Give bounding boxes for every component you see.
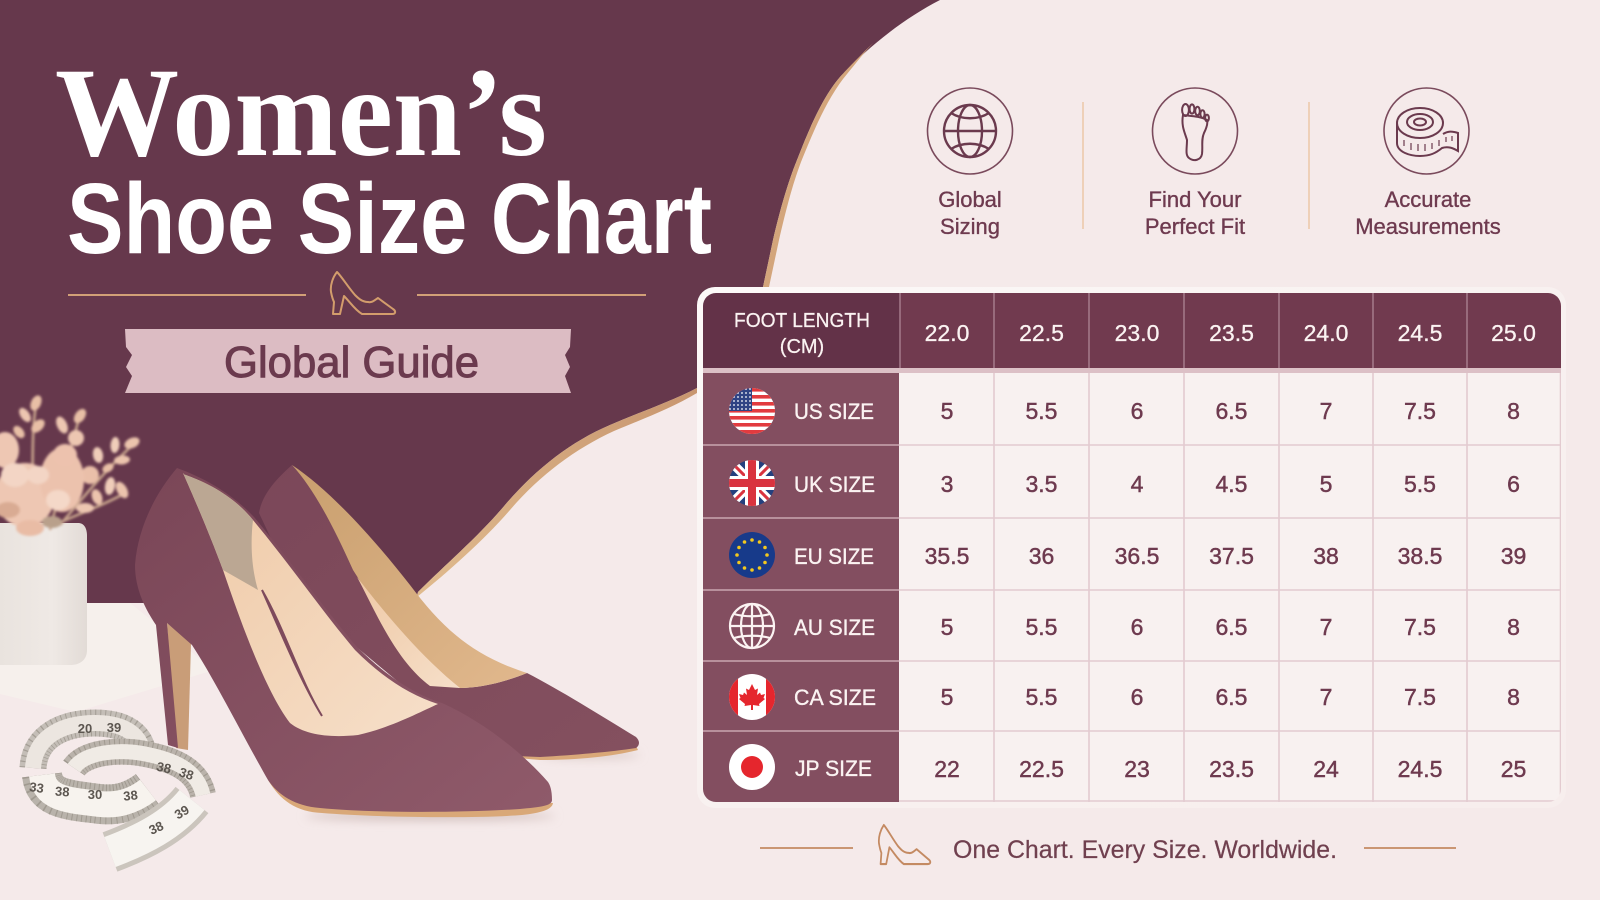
row: US size: 5 [941,398,953,424]
row: JP size: 25 [1501,756,1526,782]
ornament divider with shoe icon [68,272,646,314]
icon: EU flag [729,532,775,578]
measuring tape: 20 [78,721,92,736]
row: AU size [730,604,1520,648]
row: CA size: 5 [941,684,953,710]
row: JP size: 23 [1124,756,1150,782]
row: UK size: UK SIZE [794,472,875,497]
top feature: accurate measurements: Accurate [1385,187,1471,212]
table header row: 23.5 [1209,320,1254,346]
row: US size: 6 [1131,398,1143,424]
table header row: FOOT LENGTH [734,310,870,332]
row: EU size [729,532,1526,578]
sole edge [268,780,553,817]
row: CA size: 7.5 [1404,684,1436,710]
measuring tape: 33 [28,779,45,796]
row: US size: US SIZE [794,399,874,424]
table header row: 24.0 [1304,320,1348,346]
icon: UK flag [729,460,775,506]
row: UK size: 3.5 [1026,471,1057,497]
row: AU size: 6.5 [1216,614,1247,640]
plum curved panel [0,0,940,603]
measuring tape: 38 [177,764,196,783]
row: EU size: 39 [1501,543,1526,569]
front shoe [135,468,553,817]
row: US size: 8 [1507,398,1520,424]
row: JP size: 24.5 [1398,756,1442,782]
icon: globe [730,604,774,648]
row: JP size: 22 [934,756,960,782]
heel lining [167,623,191,750]
row: UK size: 6 [1507,471,1520,497]
table header row: 22.0 [925,320,969,346]
row: CA size: 6 [1131,684,1143,710]
row: AU size: 7.5 [1404,614,1436,640]
row: AU size: AU SIZE [794,615,875,640]
row: EU size: 37.5 [1209,543,1254,569]
top feature: global sizing [928,88,1012,239]
row: EU size: 36.5 [1115,543,1159,569]
row: EU size: EU SIZE [794,544,874,569]
icon: foot [1182,104,1209,160]
row: CA size: CA SIZE [794,685,876,710]
row: UK size: 5 [1320,471,1332,497]
row: CA size: 6.5 [1216,684,1247,710]
row: JP size: 23.5 [1209,756,1254,782]
divider [1308,102,1310,229]
row: CA size: 5.5 [1026,684,1057,710]
row: EU size: 38 [1313,543,1339,569]
row: UK size: 5.5 [1404,471,1436,497]
row: CA size [729,674,1520,720]
row: JP size: 24 [1313,756,1339,782]
ribbon: Global Guide [125,329,571,393]
row: US size: 7.5 [1404,398,1436,424]
icon: tape measure [1397,108,1458,156]
measuring tape: 38 [146,818,166,838]
row: AU size: 5 [941,614,953,640]
measuring tape: 38 [155,759,173,776]
ceramic vase [0,523,87,665]
size table [703,293,1561,802]
row: EU size: 38.5 [1398,543,1442,569]
top feature: perfect fit [1145,88,1245,239]
row: US size [729,388,1520,434]
icon: globe [944,105,996,157]
back shoe [259,465,639,760]
row: US size: 5.5 [1026,398,1057,424]
footer tagline: One Chart. Every Size. Worldwide. [953,836,1337,864]
icon: Canada flag [729,674,775,720]
size table card [697,287,1566,808]
measuring tape: 39 [107,720,121,735]
row: UK size [729,460,1520,506]
divider [1082,102,1084,229]
inner wall strip [262,590,322,716]
row: AU size: 6 [1131,614,1143,640]
row: CA size: 7 [1320,684,1332,710]
heel counter lining [183,473,258,590]
top feature: perfect fit: Perfect Fit [1145,214,1245,239]
measuring tape: 38 [123,787,139,804]
icon: outline high heel [879,825,930,864]
row: JP size [729,744,1526,790]
table header row: (CM) [780,336,824,358]
title: Shoe Size Chart: Shoe Size Chart [67,163,712,275]
row: AU size: 8 [1507,614,1520,640]
ribbon: Global Guide: Global Guide [224,338,479,387]
shoe shadows [305,752,640,820]
measuring tape: 39 [172,802,192,822]
measuring tape: 30 [88,787,102,802]
gold curve accent upper [763,43,873,287]
icon: Japan flag [729,744,775,790]
measuring tape: 38 [55,784,70,799]
top feature: global sizing: Global [938,187,1002,212]
row: JP size: JP SIZE [795,756,872,781]
row: EU size: 35.5 [925,543,969,569]
top feature: perfect fit: Find Your [1149,187,1241,212]
table header row [734,310,1536,358]
row: AU size: 7 [1320,614,1332,640]
top feature: accurate measurements [1355,88,1501,239]
suede body [135,468,552,812]
row: UK size: 4.5 [1216,471,1247,497]
measuring tape [28,720,203,852]
inner lining [183,473,438,736]
table header row: 22.5 [1019,320,1064,346]
table header row: 23.0 [1115,320,1159,346]
row: AU size: 5.5 [1026,614,1057,640]
row: UK size: 4 [1131,471,1144,497]
title: Women's: Women’s [55,43,547,183]
row: JP size: 22.5 [1019,756,1064,782]
row: EU size: 36 [1029,543,1054,569]
table header row: 25.0 [1491,320,1536,346]
row: US size: 6.5 [1216,398,1247,424]
top feature: global sizing: Sizing [940,214,1000,239]
marble tray [0,603,214,712]
dried flowers [0,394,141,536]
row: CA size: 8 [1507,684,1520,710]
icon: US flag [729,388,775,434]
top feature: accurate measurements: Measurements [1355,214,1501,239]
footer tagline [760,825,1456,864]
row: UK size: 3 [941,471,953,497]
row: US size: 7 [1320,398,1332,424]
gold curve accent lower [417,388,697,597]
table header row: 24.5 [1398,320,1442,346]
